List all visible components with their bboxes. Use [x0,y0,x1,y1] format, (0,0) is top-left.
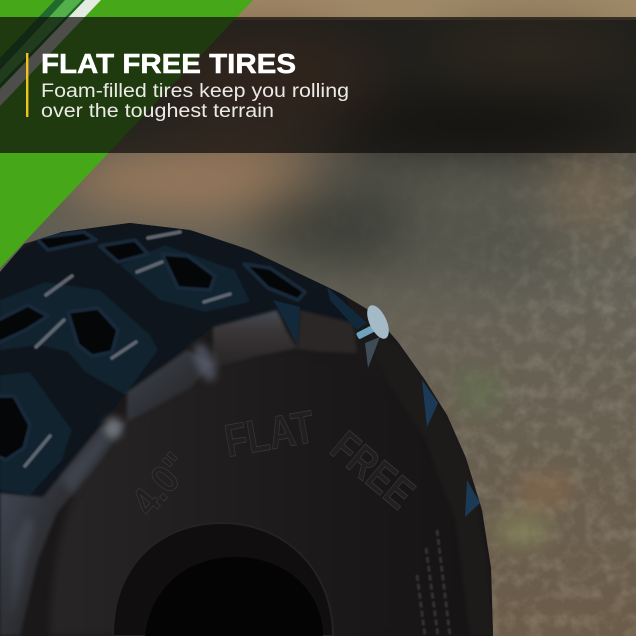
green frame wedge [0,0,253,268]
tread lugs [0,245,250,495]
accent bar [26,53,28,117]
hub opening [145,557,323,636]
subheading line 1: Foam-filled tires keep you rolling [41,81,349,102]
tread pits [0,232,305,460]
icon: nail in tire [356,305,389,339]
tread field [0,220,360,497]
banner overlay [0,17,636,153]
molded sidewall lettering: FLAT [221,400,318,467]
shoulder lobes [0,310,493,636]
molded sidewall lettering: FREE [322,422,424,519]
tire [0,220,494,636]
tire body [0,223,493,636]
molded sidewall lettering: 4.0" [123,445,199,524]
molded small print [417,530,450,636]
dark blue gaps along the tread edge [273,287,480,517]
subheading line 2: over the toughest terrain [41,101,274,122]
hub rim [113,523,333,636]
shoulder highlights [12,340,221,620]
sidewall [52,408,493,634]
heading: FLAT FREE TIRES [41,48,296,79]
tread lug edge highlights [25,232,230,466]
molded sidewall lettering [136,410,417,514]
banner text block [26,48,349,122]
